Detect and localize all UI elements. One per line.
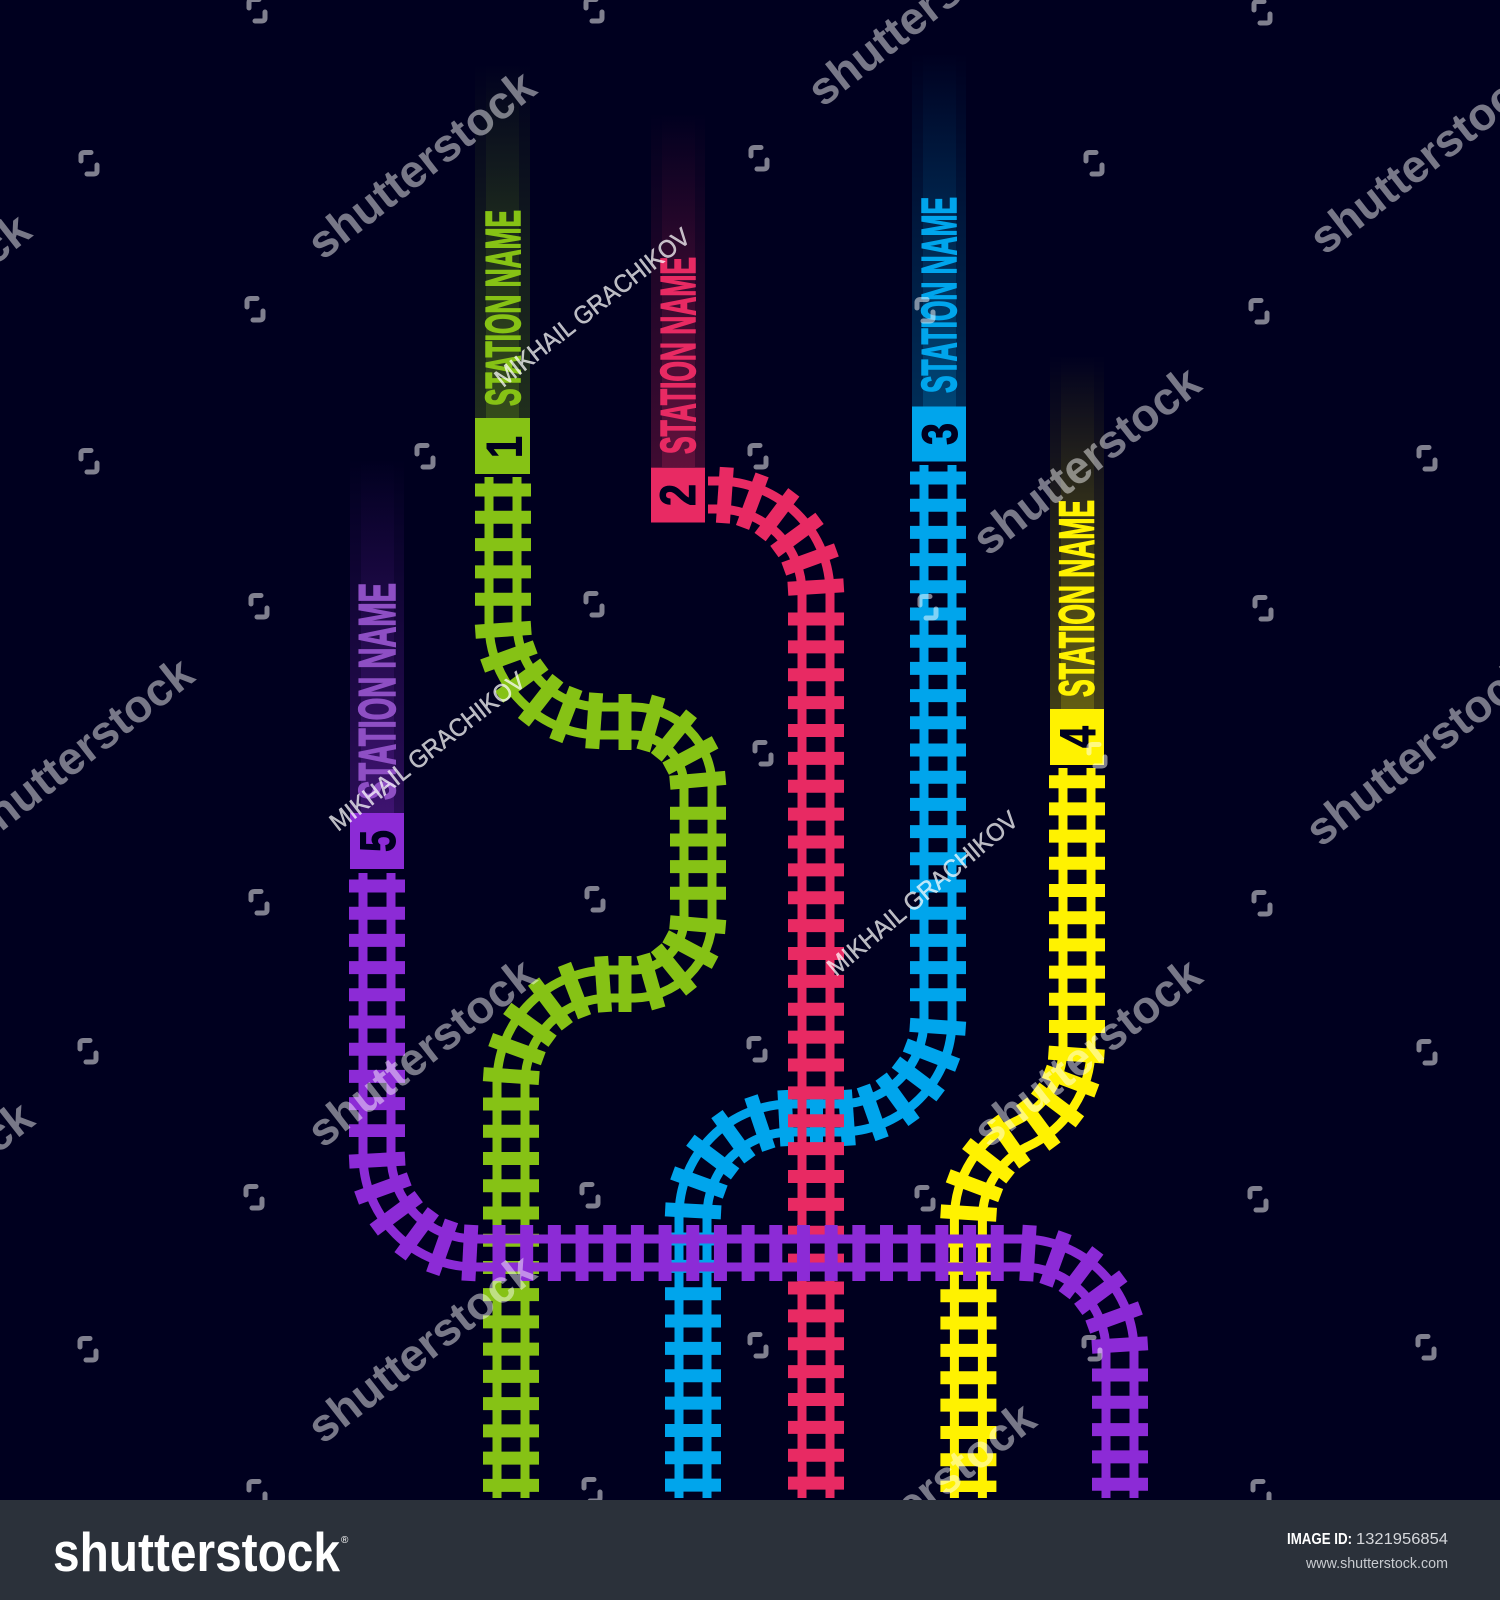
station 2 badge	[650, 468, 706, 522]
station 3 badge	[912, 406, 968, 462]
shutterstock watermarks: shutterstock	[297, 1243, 545, 1453]
blue track	[665, 465, 966, 1498]
light column: station 2	[651, 112, 705, 467]
station 4 name: STATION NAME	[1050, 500, 1104, 697]
purple track	[349, 873, 1148, 1498]
station 5 badge: 5	[350, 830, 406, 852]
author watermarks: MIKHAIL GRACHIKOV	[822, 806, 1024, 982]
light column: station 1	[475, 63, 530, 418]
author watermarks: MIKHAIL GRACHIKOV	[489, 223, 696, 393]
station 4 badge	[1050, 709, 1106, 765]
light column: station 5	[350, 458, 404, 813]
station 1 badge: 1	[476, 436, 532, 458]
station 1 name: STATION NAME	[477, 210, 531, 406]
yellow track	[940, 768, 1105, 1498]
footer logo: shutterstock	[53, 1521, 340, 1583]
station 4 badge: 4	[1050, 726, 1106, 748]
light column: station 3	[912, 52, 966, 407]
station 5 name: STATION NAME	[349, 583, 407, 800]
station 3 badge: 3	[912, 423, 968, 445]
station 2 badge: 2	[650, 484, 706, 506]
footer bar	[0, 1500, 1500, 1600]
shutterstock watermarks: shutterstock	[297, 947, 545, 1157]
footer website: www.shutterstock.com	[1305, 1555, 1448, 1572]
footer image number: 1321956854	[1356, 1531, 1448, 1548]
author watermarks	[324, 223, 1024, 982]
station 1 badge	[475, 418, 532, 474]
station 2 name: STATION NAME	[652, 257, 706, 454]
shutterstock watermarks: shutterstock	[962, 355, 1210, 565]
station 5 badge	[350, 813, 406, 869]
shutterstock watermarks: shutterstock	[797, 1391, 1045, 1600]
green track	[475, 477, 726, 1498]
station 3 name: STATION NAME	[913, 197, 967, 393]
shutterstock watermarks: shutterstock	[297, 59, 545, 269]
footer registered mark: ®	[341, 1535, 349, 1546]
footer image id: IMAGE ID:	[1287, 1531, 1352, 1548]
light column: station 4	[1050, 354, 1104, 709]
shutterstock watermarks: shutterstock	[963, 947, 1211, 1157]
author watermarks: MIKHAIL GRACHIKOV	[324, 667, 531, 837]
red track	[708, 467, 844, 1498]
